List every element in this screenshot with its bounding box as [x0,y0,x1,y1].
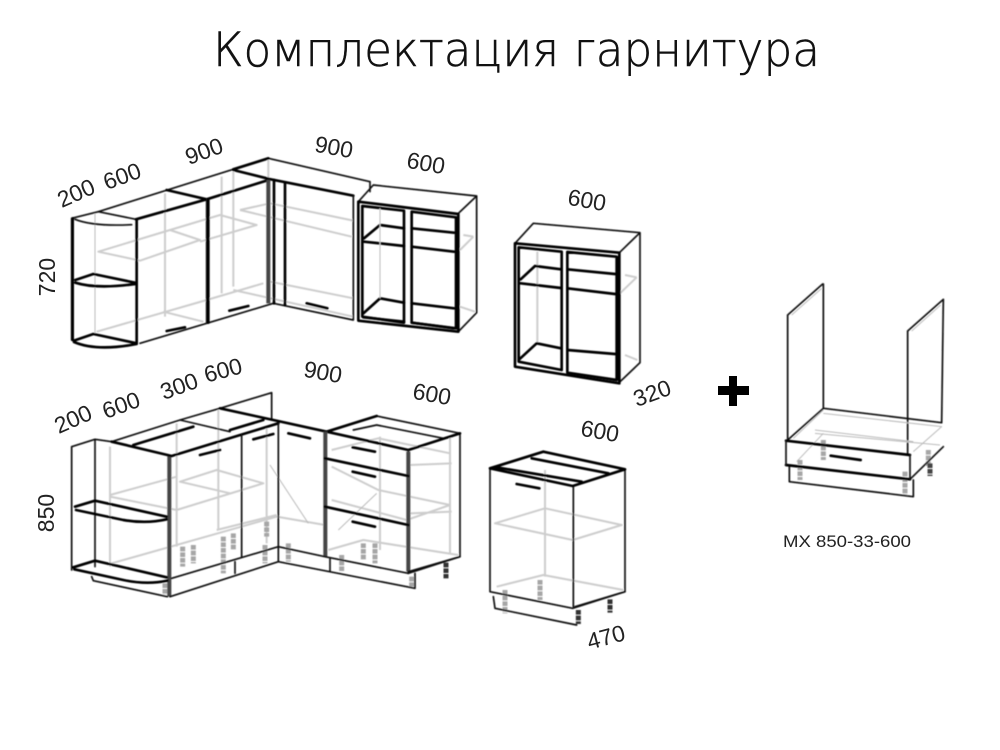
dimension labels: lower corner set [33,352,453,532]
side panels [788,284,943,455]
inner grey shelf, post and feet [495,470,623,613]
base box inner lines [793,410,942,495]
handle and legs [517,484,610,624]
dimension labels: lower corner set: 850 [33,494,59,532]
drawer fronts [325,458,408,525]
open end shelf unit [72,212,137,347]
dimension labels: base cabinet: 600 [579,415,621,447]
dimension labels: glass wall cabinet [566,184,674,412]
drawing: separate base cabinet [490,452,625,625]
dimension labels: glass wall cabinet: 320 [630,374,674,412]
dimension labels: upper corner set: 900 [182,132,226,170]
dimension labels: upper corner set: 600 [100,157,144,195]
drawing: upper corner wall cabinets [72,158,477,347]
dimension labels: upper corner set [34,131,447,296]
dimension labels: lower corner set: 300 [157,367,201,405]
dimension labels: lower corner set: 900 [302,356,344,388]
carcass [490,452,625,625]
inner grey shelves and back edges [95,160,353,333]
dimension labels: lower corner set: 600 [99,386,143,424]
title: Комплектация гарнитура [213,23,820,78]
dimension labels: upper corner set: 600 [405,147,447,179]
drawing: lower corner base cabinets [72,393,460,597]
dimension labels: glass wall cabinet: 600 [566,184,608,216]
dimension labels: base cabinet [579,415,628,655]
glass door cabinet [358,185,477,332]
dimension labels: lower corner set: 200 [50,399,96,439]
dimension labels: upper corner set: 200 [53,173,99,213]
inner grey shelves, posts and feet [110,410,458,595]
glass doors and shelves [519,247,617,380]
handle and leg [831,456,930,476]
cabinet carcass [515,223,640,383]
drawing: oven housing cabinet [786,284,943,497]
dimension labels: upper corner set: 720 [34,258,60,296]
door and drawer handles [200,433,375,527]
base box outline [786,408,943,497]
dimension labels: lower corner set: 600 [201,352,245,388]
dimension labels: lower corner set: 600 [411,378,453,410]
open end shelf panel [72,439,169,597]
drawing: separate glass wall cabinet [515,223,640,383]
dimension labels: base cabinet: 470 [584,619,628,655]
model label: МХ 850-33-600 [783,532,911,551]
plinth and bottom edges [170,547,460,597]
carcass top and sides [112,393,460,573]
corner cabinet carcass and doors [98,158,370,343]
door handles [167,303,327,331]
icon: plus sign [718,376,749,406]
dimension labels: upper corner set: 900 [313,131,355,163]
